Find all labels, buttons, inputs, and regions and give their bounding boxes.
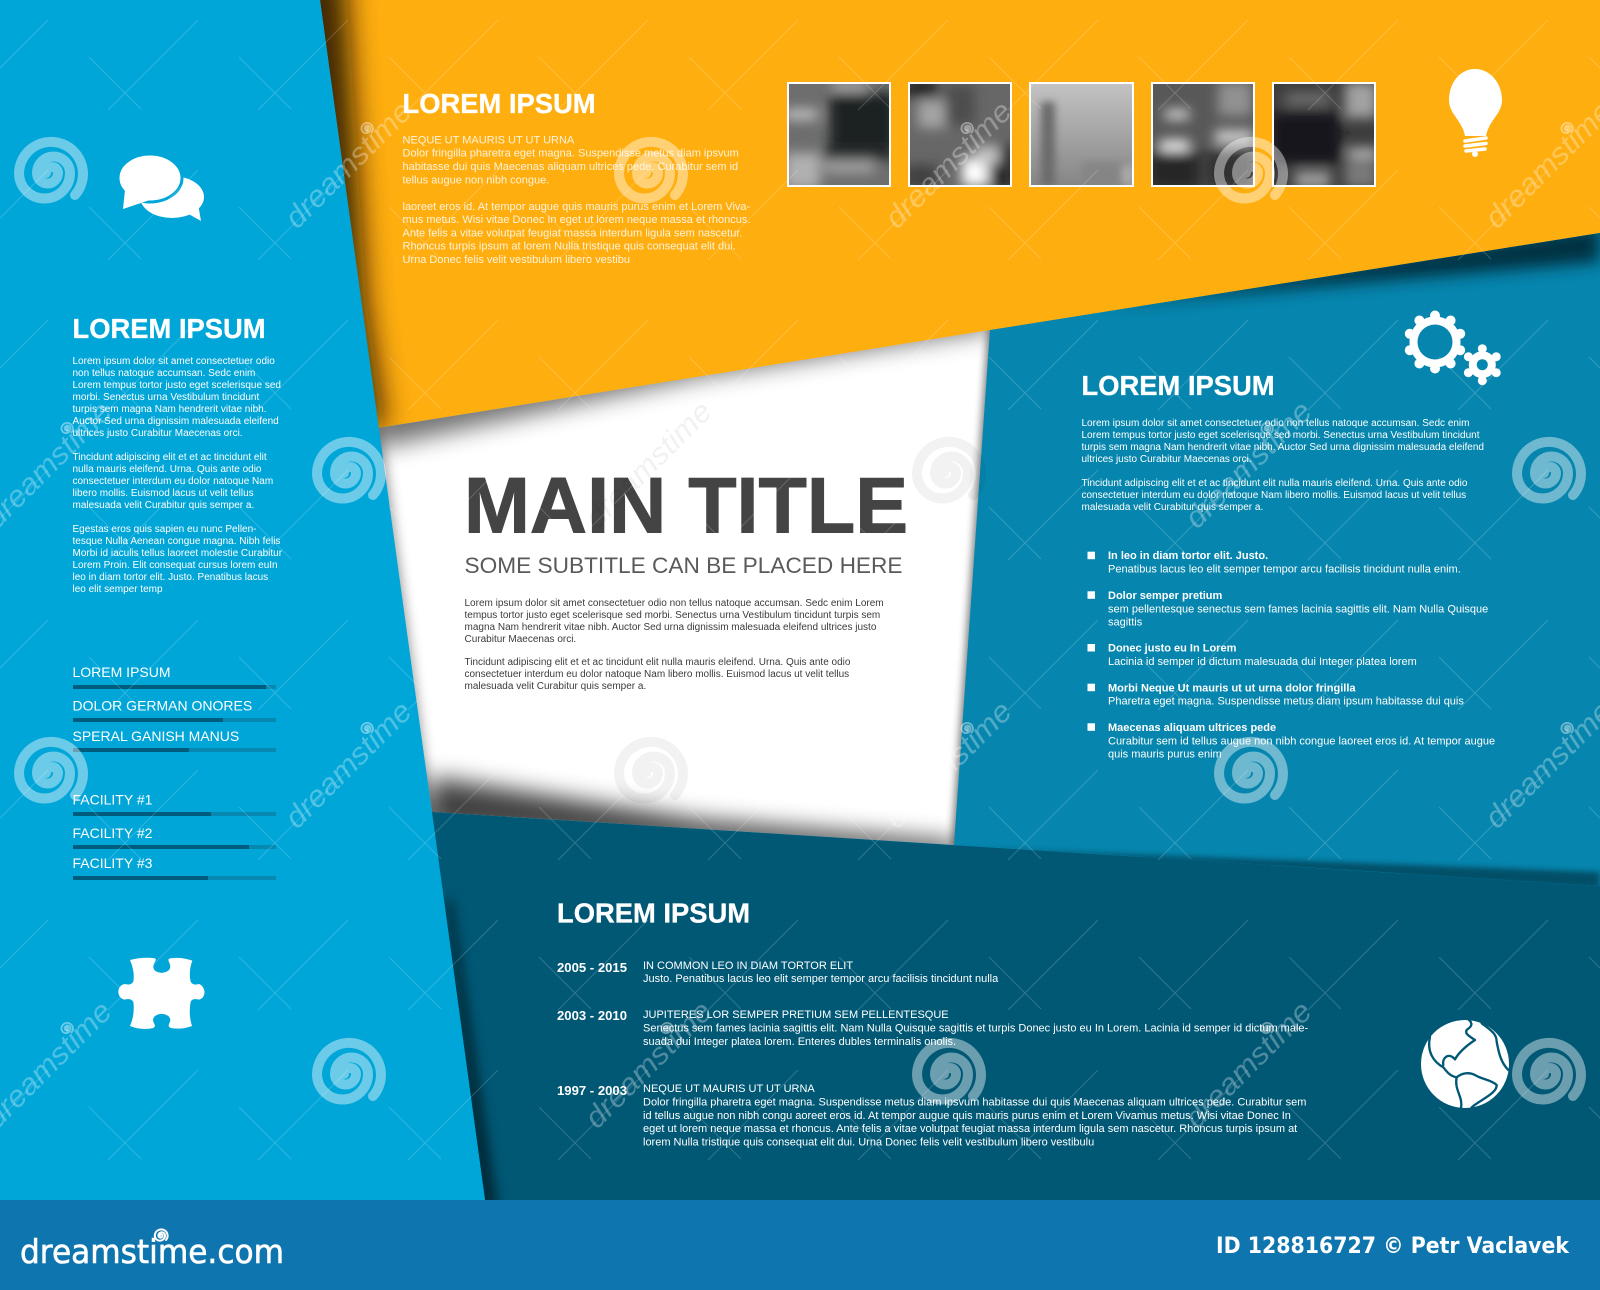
text block: left panel: non tellus natoque accumsan. Sedc enim [72, 368, 255, 379]
timeline row 1997-2003: lorem Nulla tristique quis consequat elit dui. Urna Donec felis velit vestibulum libero vestibulu [643, 1136, 1094, 1148]
icon: gears [1405, 310, 1501, 385]
panel: left blue column [0, 0, 485, 1200]
text block: orange panel: tellus augue non nibh congue. [402, 174, 549, 186]
text block: left panel: Lorem Proin. Elit consequat cursus lorem euIn [72, 560, 278, 571]
subtitle: SOME SUBTITLE CAN BE PLACED HERE [464, 553, 902, 578]
text block: orange panel: mus metus. Wisi vitae Donec In eget ut lorem neque massa et rhoncus. [402, 214, 750, 226]
text block: left panel: Egestas eros quis sapien eu nunc Pellen- [72, 524, 257, 535]
text block: orange panel: habitasse dui quis Maecenas aliquam ultrices pede. Curabitur sem id [402, 161, 738, 173]
bullet list: In leo in diam tortor elit. Justo. [1108, 550, 1268, 562]
text block: left panel: malesuada velit Curabitur quis semper a. [72, 500, 254, 511]
text block: left panel: Morbi id iaculis tellus laoreet molestie Curabitur [72, 548, 283, 559]
timeline row 1997-2003: id tellus augue non nibh congu aoreet eros id. At tempor augue quis mauris purus enim et Lorem Vivamus metus. Wisi vitae Donec In [643, 1110, 1291, 1122]
timeline row 2003-2010: JUPITERES LOR SEMPER PRETIUM SEM PELLENTESQUE [643, 1009, 949, 1021]
text block: left panel: leo elit semper temp [72, 584, 163, 595]
footer bar [0, 1200, 1600, 1290]
bullet list: sem pellentesque senectus sem fames lacinia sagittis elit. Nam Nulla Quisque [1108, 603, 1488, 615]
text block: left panel: Lorem tempus tortor justo eget scelerisque sed [72, 380, 281, 391]
progress bars: facilities: FACILITY #3 [72, 855, 153, 871]
timeline row 2003-2010: Senectus sem fames lacinia sagittis elit. Nam Nulla Quisque sagittis et turpis Donec justo eu In Lorem. Lacinia id semper id dictum male- [643, 1022, 1309, 1034]
text block: intro: Tincidunt adipiscing elit et et ac tincidunt elit nulla mauris eleifend. Urna. Quis ante odio [464, 657, 851, 668]
text block: intro: Curabitur Maecenas orci. [464, 634, 576, 645]
watermark overlay: dreamstime [579, 395, 719, 535]
text block: intro [464, 598, 884, 692]
text block: teal panel [1082, 418, 1484, 513]
text block: left panel: consectetuer interdum eu dolor natoque Nam [72, 476, 273, 487]
timeline row 2005-2015: IN COMMON LEO IN DIAM TORTOR ELIT [643, 960, 853, 972]
bullet list [1088, 550, 1495, 761]
text block: left panel: ultrices justo Curabitur Maecenas orci. [72, 428, 243, 439]
bullet list: Pharetra eget magna. Suspendisse metus diam ipsum habitasse dui quis [1108, 696, 1464, 708]
footer credit: ID 128816727 © Petr Vaclavek [1216, 1234, 1570, 1259]
text block: teal panel: Lorem tempus tortor justo eget scelerisque sed morbi. Senectus urna Vestibulum tincidunt [1082, 430, 1480, 441]
text block: left panel: nulla mauris eleifend. Urna. Quis ante odio [72, 464, 262, 475]
text block: orange panel [402, 134, 751, 266]
progress bars: skills: LOREM IPSUM [72, 664, 171, 680]
timeline row 1997-2003: 1997 - 2003 [557, 1083, 627, 1098]
progress bars: facilities: FACILITY #1 [72, 792, 153, 808]
text block: orange panel: NEQUE UT MAURIS UT UT URNA [402, 134, 575, 146]
text block: teal panel: malesuada velit Curabitur quis semper a. [1082, 502, 1263, 513]
text block: left panel: turpis sem magna Nam hendrerit vitae nibh. [72, 404, 266, 415]
bullet list: Penatibus lacus leo elit semper tempor arcu facilisis tincidunt nulla enim. [1108, 563, 1461, 575]
text block: left panel: libero mollis. Euismod lacus ut velit tellus [72, 488, 254, 499]
photo 4 [1148, 82, 1255, 190]
text block: orange panel: Dolor fringilla pharetra eget magna. Suspendisse metus diam ipsvum [402, 148, 739, 160]
progress bars: skills: DOLOR GERMAN ONORES [72, 698, 252, 714]
timeline row 2003-2010: suada dui Integer platea lorem. Enteres dubles terminalis onolis. [643, 1036, 956, 1048]
heading: teal panel: LOREM IPSUM [1082, 370, 1274, 401]
bullet list: Dolor semper pretium [1108, 590, 1223, 602]
icon: globe [1421, 1019, 1509, 1108]
text block: left panel: morbi. Senectus urna Vestibulum tincidunt [72, 392, 259, 403]
panel: white centre [378, 330, 990, 845]
icon: puzzle piece [118, 958, 204, 1029]
photo 2 [905, 80, 1016, 189]
photo 5 [1270, 82, 1378, 188]
bullet list: sagittis [1108, 616, 1143, 628]
watermark overlay: dreamstime [279, 95, 419, 235]
timeline row 1997-2003: NEQUE UT MAURIS UT UT URNA [643, 1083, 815, 1095]
panel: dark bottom [432, 812, 1600, 1210]
timeline row 2005-2015: Justo. Penatibus lacus leo elit semper tempor arcu facilisis tincidunt nulla [643, 973, 999, 985]
progress bars: facilities [72, 792, 276, 880]
watermark overlay: dreamstime [879, 95, 1019, 235]
icon: speech bubbles [118, 154, 204, 221]
text block: teal panel: consectetuer interdum eu dolor natoque Nam libero mollis. Euismod lacus ut velit tellus [1082, 490, 1466, 501]
text block: left panel [72, 356, 283, 595]
text block: orange panel: Urna Donec felis velit vestibulum libero vestibu [402, 254, 630, 266]
bullet list: Lacinia id semper id dictum malesuada dui Integer platea lorem [1108, 656, 1417, 668]
panel: orange top [290, 0, 1600, 428]
text block: intro: magna Nam hendrerit vitae nibh. Auctor Sed urna dignissim malesuada eleifend ultrices justo [464, 622, 877, 633]
icon: light bulb [1449, 69, 1502, 157]
footer logo: dreamstime.com [20, 1232, 284, 1271]
main title: MAIN TITLE [464, 460, 908, 550]
heading: orange panel: LOREM IPSUM [402, 88, 596, 119]
photo 3 [1029, 82, 1134, 190]
text block: left panel: Lorem ipsum dolor sit amet consectetuer odio [72, 356, 275, 367]
heading: left panel: LOREM IPSUM [72, 313, 266, 344]
watermark overlay: dreamstime [279, 695, 419, 835]
bullet list: Donec justo eu In Lorem [1108, 643, 1237, 655]
text block: teal panel: ultrices justo Curabitur Maecenas orci. [1082, 454, 1252, 465]
panel: teal right [954, 225, 1600, 890]
text block: left panel: tesque Nulla Aenean congue magna. Nibh felis [72, 536, 280, 547]
watermark overlay: dreamstime [579, 995, 719, 1135]
photo 1 [785, 82, 896, 189]
text block: teal panel: Lorem ipsum dolor sit amet consectetuer odio non tellus natoque accumsan. Sedc enim [1082, 418, 1470, 429]
bullet list: Curabitur sem id tellus augue non nibh congue laoreet eros id. At tempor augue [1108, 735, 1495, 747]
text block: teal panel: turpis sem magna Nam hendrerit vitae nibh. Auctor Sed urna dignissim malesuada eleifend [1082, 442, 1484, 453]
text block: intro: Lorem ipsum dolor sit amet consectetuer odio non tellus natoque accumsan. Sedc enim Lorem [464, 598, 884, 609]
timeline row 1997-2003: eget ut lorem neque massa et rhoncus. Ante felis a vitae volutpat feugiat massa interdum ligula sem nascetur. Rhoncus turpis ipsum at [643, 1123, 1297, 1135]
progress bars: skills [72, 664, 276, 752]
text block: orange panel: Ante felis a vitae volutpat feugiat massa interdum ligula sem nascetur. [402, 227, 742, 239]
watermark overlay: dreamstime [879, 695, 1019, 835]
watermark overlay: dreamstime [1179, 395, 1319, 535]
text block: intro: tempus tortor justo eget scelerisque sed morbi. Senectus urna Vestibulum tincidunt turpis sem [464, 610, 880, 621]
progress bars: skills: SPERAL GANISH MANUS [72, 728, 239, 744]
bullet list: Maecenas aliquam ultrices pede [1108, 722, 1276, 734]
bullet list: quis mauris purus enim [1108, 749, 1222, 761]
text block: teal panel: Tincidunt adipiscing elit et et ac tincidunt elit nulla mauris eleifend. Urna. Quis ante odio [1082, 478, 1468, 489]
text block: left panel: leo in diam tortor elit. Justo. Penatibus lacus [72, 572, 268, 583]
watermark overlay: dreamstime [1179, 995, 1319, 1135]
timeline row 2005-2015: 2005 - 2015 [557, 960, 627, 975]
text block: orange panel: laoreet eros id. At tempor augue quis mauris purus enim et Lorem Viva- [402, 201, 751, 213]
bullet list: Morbi Neque Ut mauris ut ut urna dolor fringilla [1108, 682, 1356, 694]
timeline row 1997-2003 [557, 1083, 1306, 1148]
timeline row 2005-2015 [557, 960, 999, 985]
text block: orange panel: Rhoncus turpis ipsum at lorem Nulla tristique quis consequat elit dui. [402, 241, 736, 253]
image strip: five photos [785, 80, 1378, 190]
heading: dark panel: LOREM IPSUM [557, 898, 750, 928]
timeline row 1997-2003: Dolor fringilla pharetra eget magna. Suspendisse metus diam ipsvum habitasse dui quis Maecenas aliquam ultrices pede. Curabitur sem [643, 1096, 1306, 1108]
timeline row 2003-2010 [557, 1008, 1309, 1048]
text block: intro: consectetuer interdum eu dolor natoque Nam libero mollis. Euismod lacus ut velit tellus [464, 669, 849, 680]
text block: intro: malesuada velit Curabitur quis semper a. [464, 681, 646, 692]
timeline row 2003-2010: 2003 - 2010 [557, 1008, 627, 1023]
progress bars: facilities: FACILITY #2 [72, 825, 153, 841]
text block: left panel: Auctor Sed urna dignissim malesuada eleifend [72, 416, 279, 427]
text block: left panel: Tincidunt adipiscing elit et et ac tincidunt elit [72, 452, 267, 463]
